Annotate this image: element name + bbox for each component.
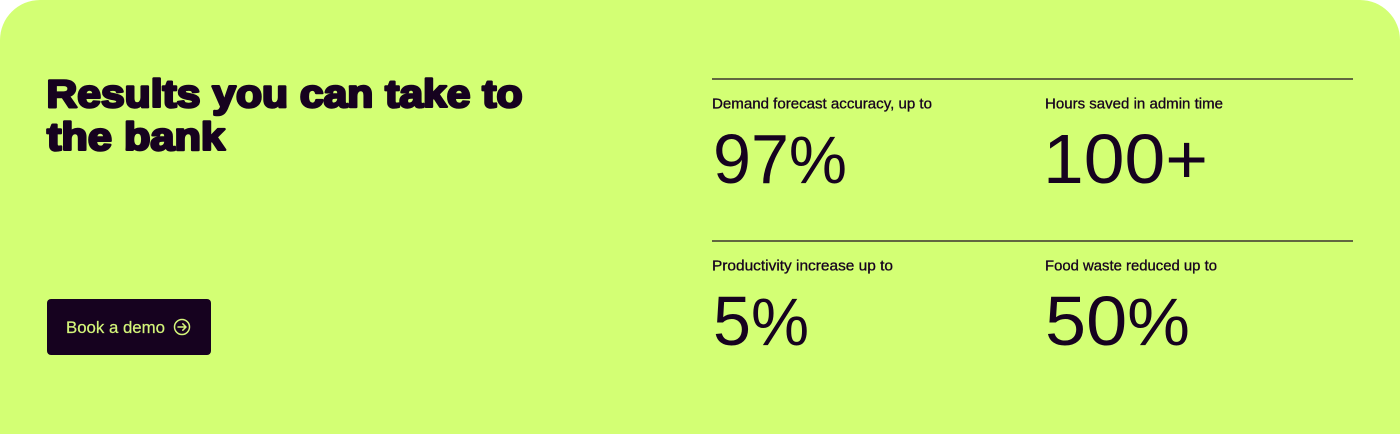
stat: hours saved: 100+ (1043, 120, 1208, 198)
heading: Results you can take to (46, 73, 522, 116)
stat: food waste reduced (1045, 258, 1217, 360)
stat: food waste reduced: 50% (1045, 282, 1190, 360)
heading: the bank (47, 116, 226, 159)
heading (46, 73, 522, 159)
stat: productivity increase: Productivity increase up to (712, 258, 893, 274)
button: book a demo: Book a demo (66, 318, 165, 337)
stat: demand forecast accuracy: Demand forecast accuracy, up to (712, 96, 932, 112)
stat: food waste reduced: Food waste reduced up to (1045, 258, 1217, 274)
stat: demand forecast accuracy (712, 78, 1353, 198)
stat: productivity increase: 5% (713, 282, 809, 360)
stat: productivity increase (712, 240, 1353, 360)
stat: hours saved: Hours saved in admin time (1045, 96, 1223, 112)
button: book a demo (47, 299, 211, 355)
stat: demand forecast accuracy: 97% (713, 120, 847, 198)
stat: hours saved (1043, 96, 1223, 198)
icon: arrow in circle (174, 320, 190, 334)
